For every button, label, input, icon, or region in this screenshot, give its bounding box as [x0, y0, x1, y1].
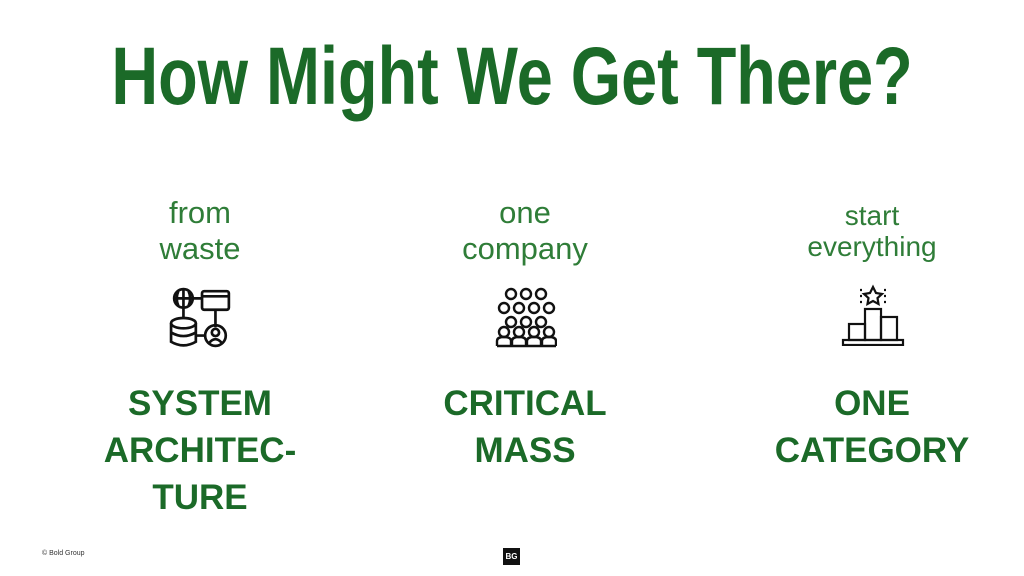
label 1: ARCHITEC-	[104, 431, 296, 470]
label 2: CRITICAL	[443, 384, 607, 423]
label 1: SYSTEM	[128, 384, 272, 423]
title: How Might We Get There?	[111, 31, 913, 122]
logo BG: BG	[506, 552, 518, 561]
subtitle 1	[160, 195, 240, 266]
subtitle 2: company	[462, 231, 588, 266]
subtitle 3: everything	[807, 231, 937, 262]
label 1	[104, 384, 296, 517]
label 2: MASS	[474, 431, 576, 470]
column 1	[104, 195, 296, 517]
subtitle 3	[807, 200, 937, 262]
footer copyright: © Bold Group	[42, 550, 85, 557]
icon: podium	[842, 284, 904, 346]
icon: system architecture	[170, 288, 230, 348]
subtitle 3: start	[845, 200, 899, 231]
subtitle 2	[462, 195, 588, 266]
subtitle 1: from	[169, 195, 231, 230]
column 2	[443, 195, 607, 470]
label 3: CATEGORY	[775, 431, 969, 470]
label 1: TURE	[152, 478, 248, 517]
logo BG	[503, 548, 520, 565]
subtitle 1: waste	[160, 231, 240, 266]
subtitle 2: one	[499, 195, 551, 230]
label 3: ONE	[834, 384, 910, 423]
icon: crowd	[496, 288, 557, 348]
column 3	[775, 200, 969, 470]
label 2	[443, 384, 607, 470]
label 3	[775, 384, 969, 470]
